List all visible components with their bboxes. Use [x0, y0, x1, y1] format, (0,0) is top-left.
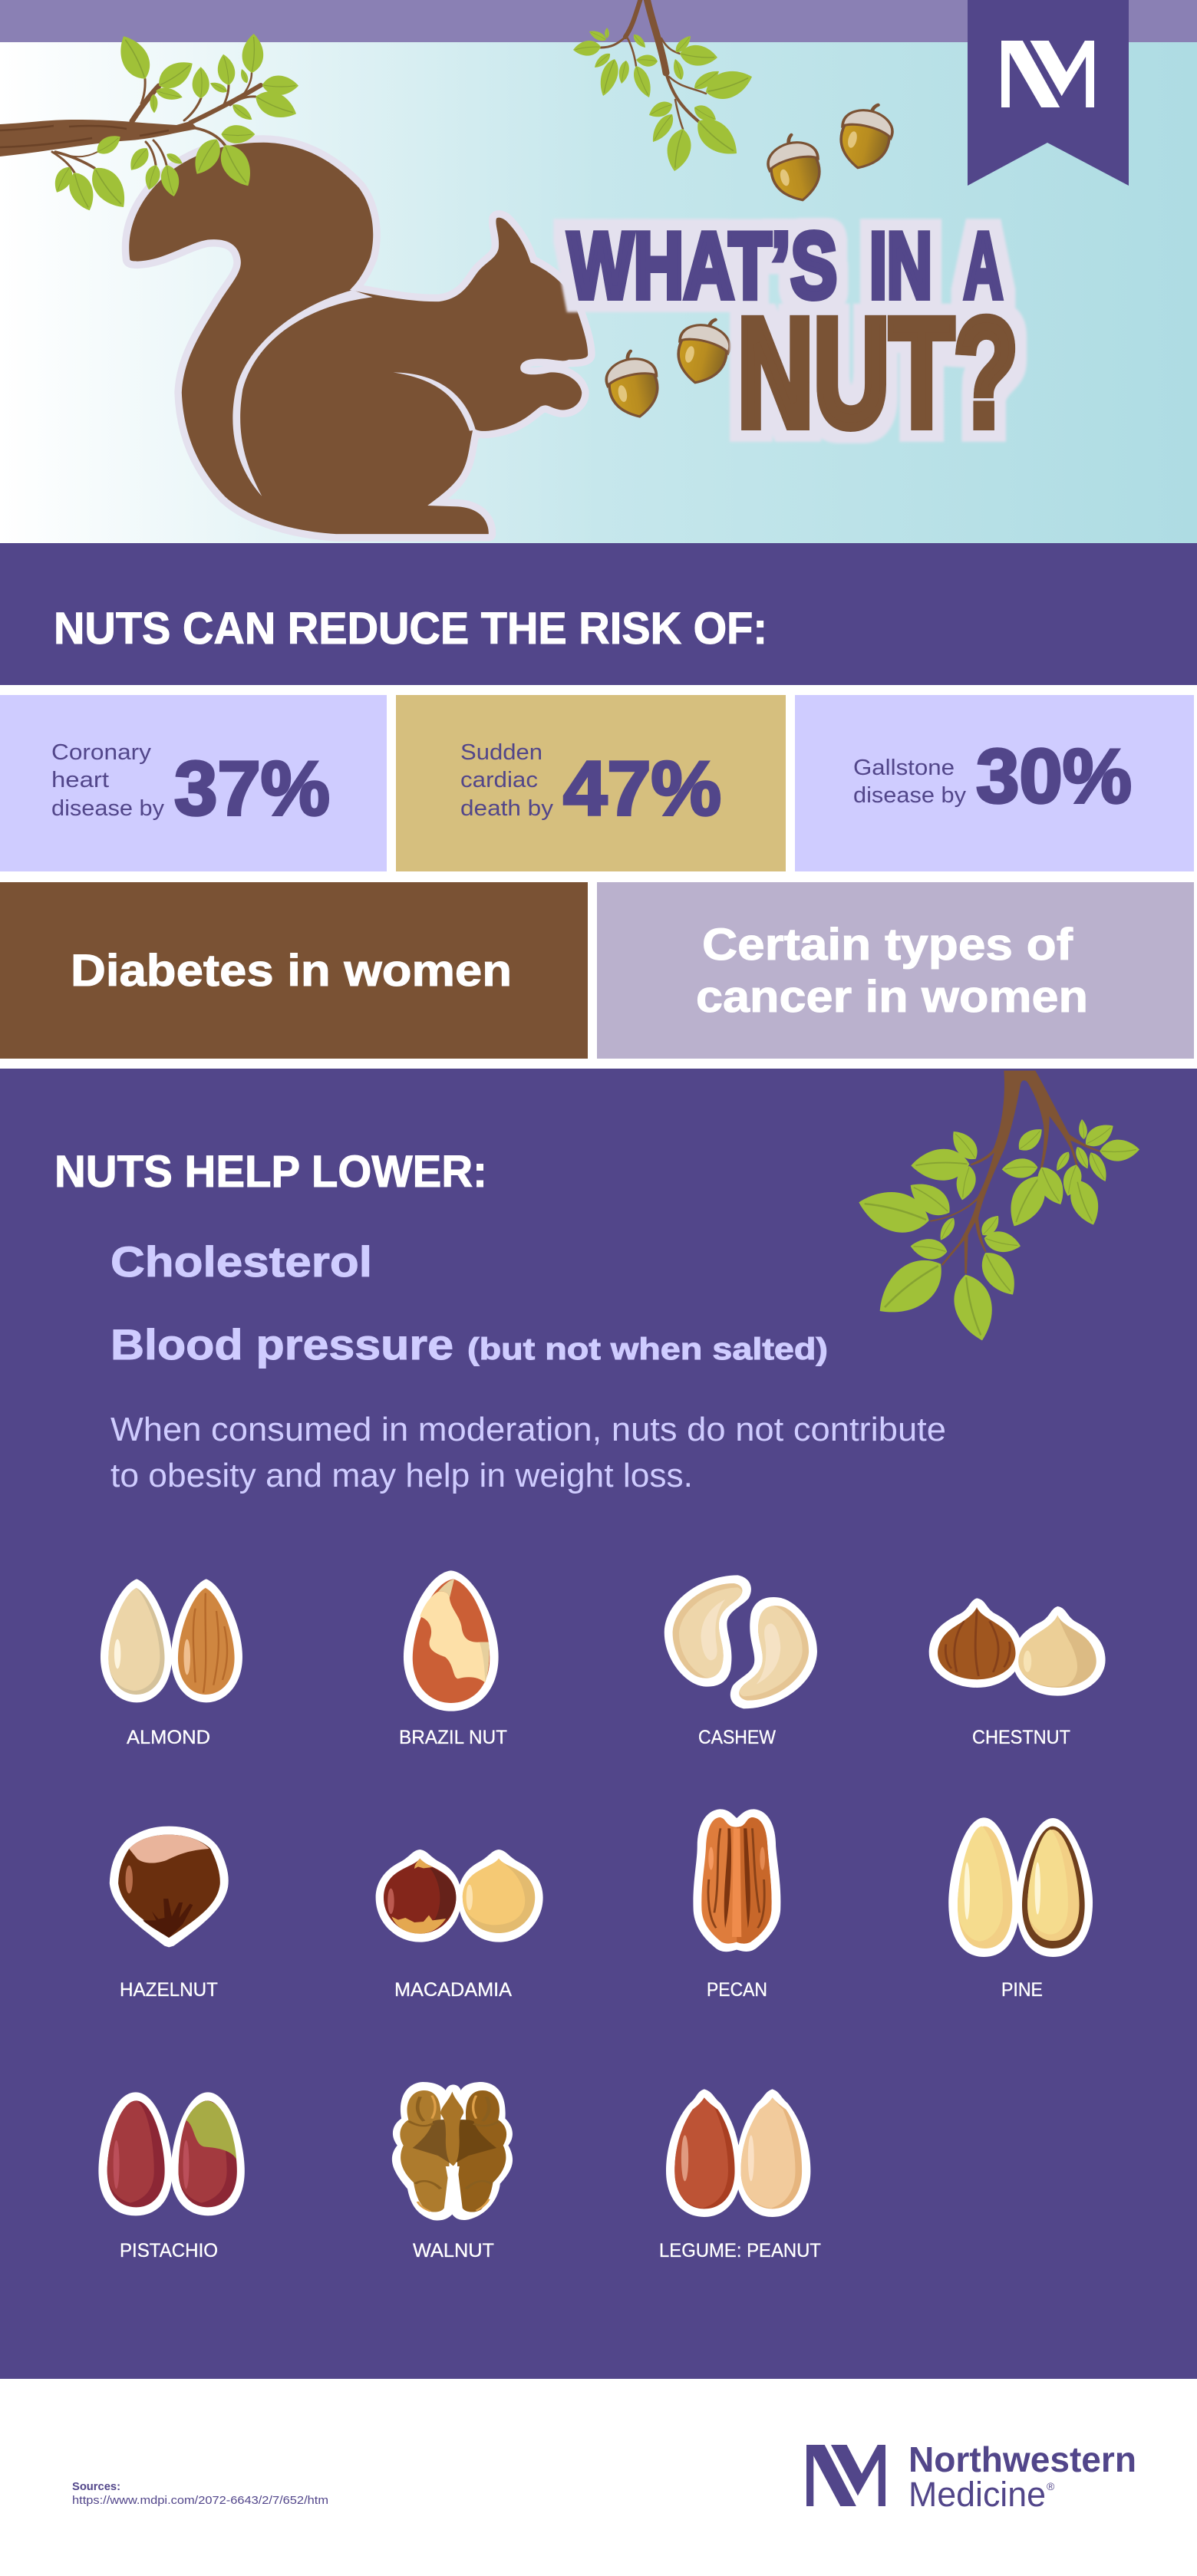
- panel: coronary heart disease stat: heart: [51, 768, 109, 792]
- label: CHESTNUT: [972, 1727, 1070, 1748]
- panel: sudden cardiac death stat: 47%: [563, 746, 721, 832]
- nut: pistachio: [98, 2092, 245, 2261]
- label: HAZELNUT: [120, 1979, 218, 2001]
- text block: moderation note: When consumed in moderation, nuts do not contribute: [110, 1411, 946, 1448]
- icon: acorns: [602, 97, 899, 422]
- label: PISTACHIO: [120, 2240, 218, 2261]
- panel: gallstone disease stat: Gallstone: [853, 756, 955, 780]
- label: MACADAMIA: [394, 1979, 512, 2001]
- label: LEGUME: PEANUT: [659, 2240, 821, 2261]
- title: [568, 213, 1018, 459]
- panel: header illustration: [0, 0, 1197, 543]
- icon: left branch with leaves: [0, 31, 301, 215]
- panel: coronary heart disease stat: [0, 695, 387, 871]
- label: PINE: [1001, 1979, 1043, 2001]
- footer: sources: Sources:: [72, 2480, 120, 2493]
- nut: pecan: [693, 1809, 780, 2001]
- panel: coronary heart disease stat: 37%: [174, 746, 330, 832]
- panel: sudden cardiac death stat: death by: [460, 796, 554, 821]
- title: NUT?: [737, 286, 1018, 459]
- title: IN: [869, 213, 932, 318]
- nut: cashew: [664, 1575, 817, 1748]
- footer: Northwestern Medicine logo: [806, 2439, 1136, 2514]
- ribbon with NM logo: [968, 0, 1129, 186]
- panel: coronary heart disease stat: Coronary: [51, 740, 152, 765]
- panel: diabetes in women: Diabetes in women: [71, 946, 512, 996]
- panel: sudden cardiac death stat: Sudden: [460, 740, 542, 765]
- footer: Northwestern Medicine logo: Medicine: [908, 2475, 1046, 2514]
- panel: risk reduction heading band: [0, 543, 1197, 685]
- panel: nuts help lower: [0, 1069, 1197, 2379]
- nut: brazil nut: [399, 1570, 507, 1748]
- title: A: [964, 213, 1003, 318]
- label: BRAZIL NUT: [399, 1727, 507, 1748]
- label: WALNUT: [413, 2240, 494, 2261]
- top band: [0, 0, 1197, 42]
- label: PECAN: [707, 1979, 767, 2001]
- sky gradient background: [0, 42, 1197, 543]
- nut: pine: [948, 1817, 1093, 2001]
- panel: gallstone disease stat: [795, 695, 1194, 871]
- icon: top centre branch with leaves: [572, 0, 756, 173]
- nut: walnut: [392, 2082, 513, 2261]
- benefit note: but not when salted: (but not when salted): [467, 1332, 828, 1366]
- panel: gallstone disease stat: disease by: [853, 783, 967, 808]
- panel: cancer in women: Certain types of: [702, 920, 1073, 970]
- label: ALMOND: [127, 1727, 210, 1748]
- benefit: cholesterol: Cholesterol: [110, 1237, 372, 1286]
- footer: sources: https://www.mdpi.com/2072-6643/2/7/652/htm: [72, 2494, 328, 2507]
- panel: sudden cardiac death stat: [396, 695, 786, 871]
- text block: moderation note: to obesity and may help in weight loss.: [110, 1457, 693, 1494]
- icon: branch with leaves on purple: [854, 1071, 1140, 1345]
- title: WHAT’S: [568, 213, 837, 318]
- footer: Northwestern Medicine logo: Northwestern: [908, 2439, 1136, 2479]
- panel: sudden cardiac death stat: cardiac: [460, 768, 538, 792]
- panel: diabetes in women: [0, 882, 588, 1059]
- benefit: blood pressure: Blood pressure: [110, 1320, 453, 1369]
- heading: nuts can reduce the risk: NUTS CAN REDUCE THE RISK OF:: [54, 604, 767, 654]
- footer: sources: [72, 2480, 328, 2507]
- footer: Northwestern Medicine logo: ®: [1047, 2480, 1055, 2492]
- nut: legume peanut: [659, 2089, 821, 2261]
- heading: nuts help lower: NUTS HELP LOWER:: [54, 1147, 487, 1197]
- label: CASHEW: [698, 1727, 776, 1748]
- icon: squirrel: [129, 143, 588, 534]
- panel: coronary heart disease stat: disease by: [51, 796, 165, 821]
- text block: moderation note: [110, 1411, 946, 1494]
- nut: hazelnut: [110, 1827, 229, 2001]
- nut: macadamia: [376, 1850, 543, 2001]
- nut: chestnut: [929, 1598, 1106, 1748]
- panel: cancer in women: [597, 882, 1194, 1059]
- panel: cancer in women: cancer in women: [696, 972, 1088, 1022]
- panel: gallstone disease stat: 30%: [976, 733, 1132, 819]
- nut: almond: [101, 1579, 242, 1748]
